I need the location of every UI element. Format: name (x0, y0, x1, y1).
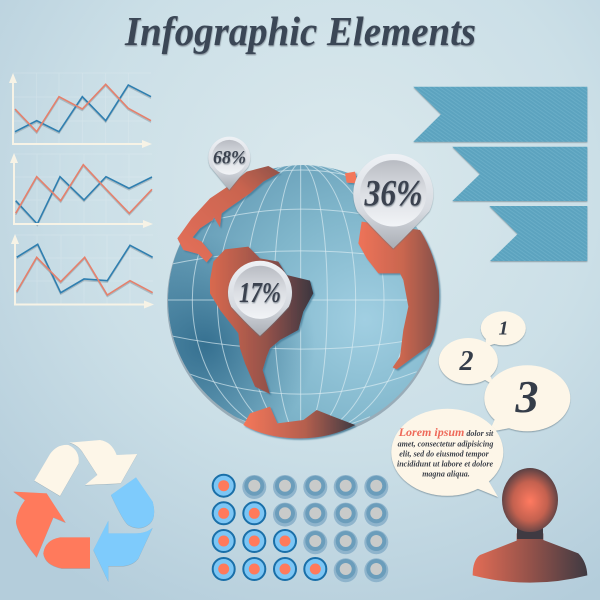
person neck (517, 528, 543, 539)
bubble: lorem ipsum: incididunt ut labore et dolore (397, 460, 493, 468)
bubble: lorem ipsum: amet, consectetur adipisicing (398, 440, 493, 448)
ribbon 2 (452, 147, 587, 201)
bubble 1: 1 (498, 318, 508, 340)
globe (167, 160, 440, 440)
bubble 1 (481, 311, 526, 347)
bubble 3 (484, 365, 570, 432)
pin: 17%: 17% (239, 278, 281, 309)
continents (177, 166, 439, 438)
icon: person (473, 468, 587, 583)
globe sphere (168, 165, 429, 424)
row 1 (213, 475, 388, 499)
line chart 2 (10, 153, 153, 228)
continent: antarctica (243, 407, 355, 438)
person shoulders (473, 533, 587, 583)
speech bubbles (391, 311, 570, 497)
title: Infographic Elements (124, 8, 476, 54)
recycle icon (13, 440, 154, 582)
globe shadow (167, 166, 439, 438)
pin: 36% (353, 154, 433, 248)
bubble: lorem ipsum: Lorem ipsum dolor sit (399, 425, 493, 439)
pin: 36%: 36% (364, 174, 422, 214)
pin: 17% (228, 261, 292, 336)
blue arrow (93, 521, 153, 582)
bubble: lorem ipsum (391, 409, 503, 497)
cream arrow (69, 440, 137, 485)
cream segment (34, 445, 79, 496)
continent: small island (345, 172, 357, 183)
continent: africa (358, 222, 439, 369)
row 4 (213, 558, 388, 582)
blue segment (111, 477, 154, 528)
row 3 (213, 530, 388, 554)
continent: south america (210, 247, 313, 394)
pin: 68% (208, 137, 250, 190)
bubble: lorem ipsum: magna aliqua. (422, 470, 470, 478)
row 2 (213, 502, 388, 527)
continent: north america (177, 166, 280, 262)
pin: 68%: 68% (213, 148, 246, 168)
line chart 1 (9, 73, 152, 148)
ribbon 3 (489, 206, 587, 261)
red arrow (13, 492, 66, 557)
red segment (43, 537, 90, 568)
bubble 2: 2 (458, 346, 474, 377)
person head (502, 468, 558, 532)
bubble 2 (439, 338, 498, 386)
line chart 3 (11, 234, 154, 308)
ribbon 1 (413, 87, 587, 142)
bubble: lorem ipsum: elit, sed do eiusmod tempor (399, 450, 490, 458)
ribbons (413, 87, 587, 261)
dot matrix (213, 475, 388, 582)
bubble 3: 3 (514, 371, 538, 422)
